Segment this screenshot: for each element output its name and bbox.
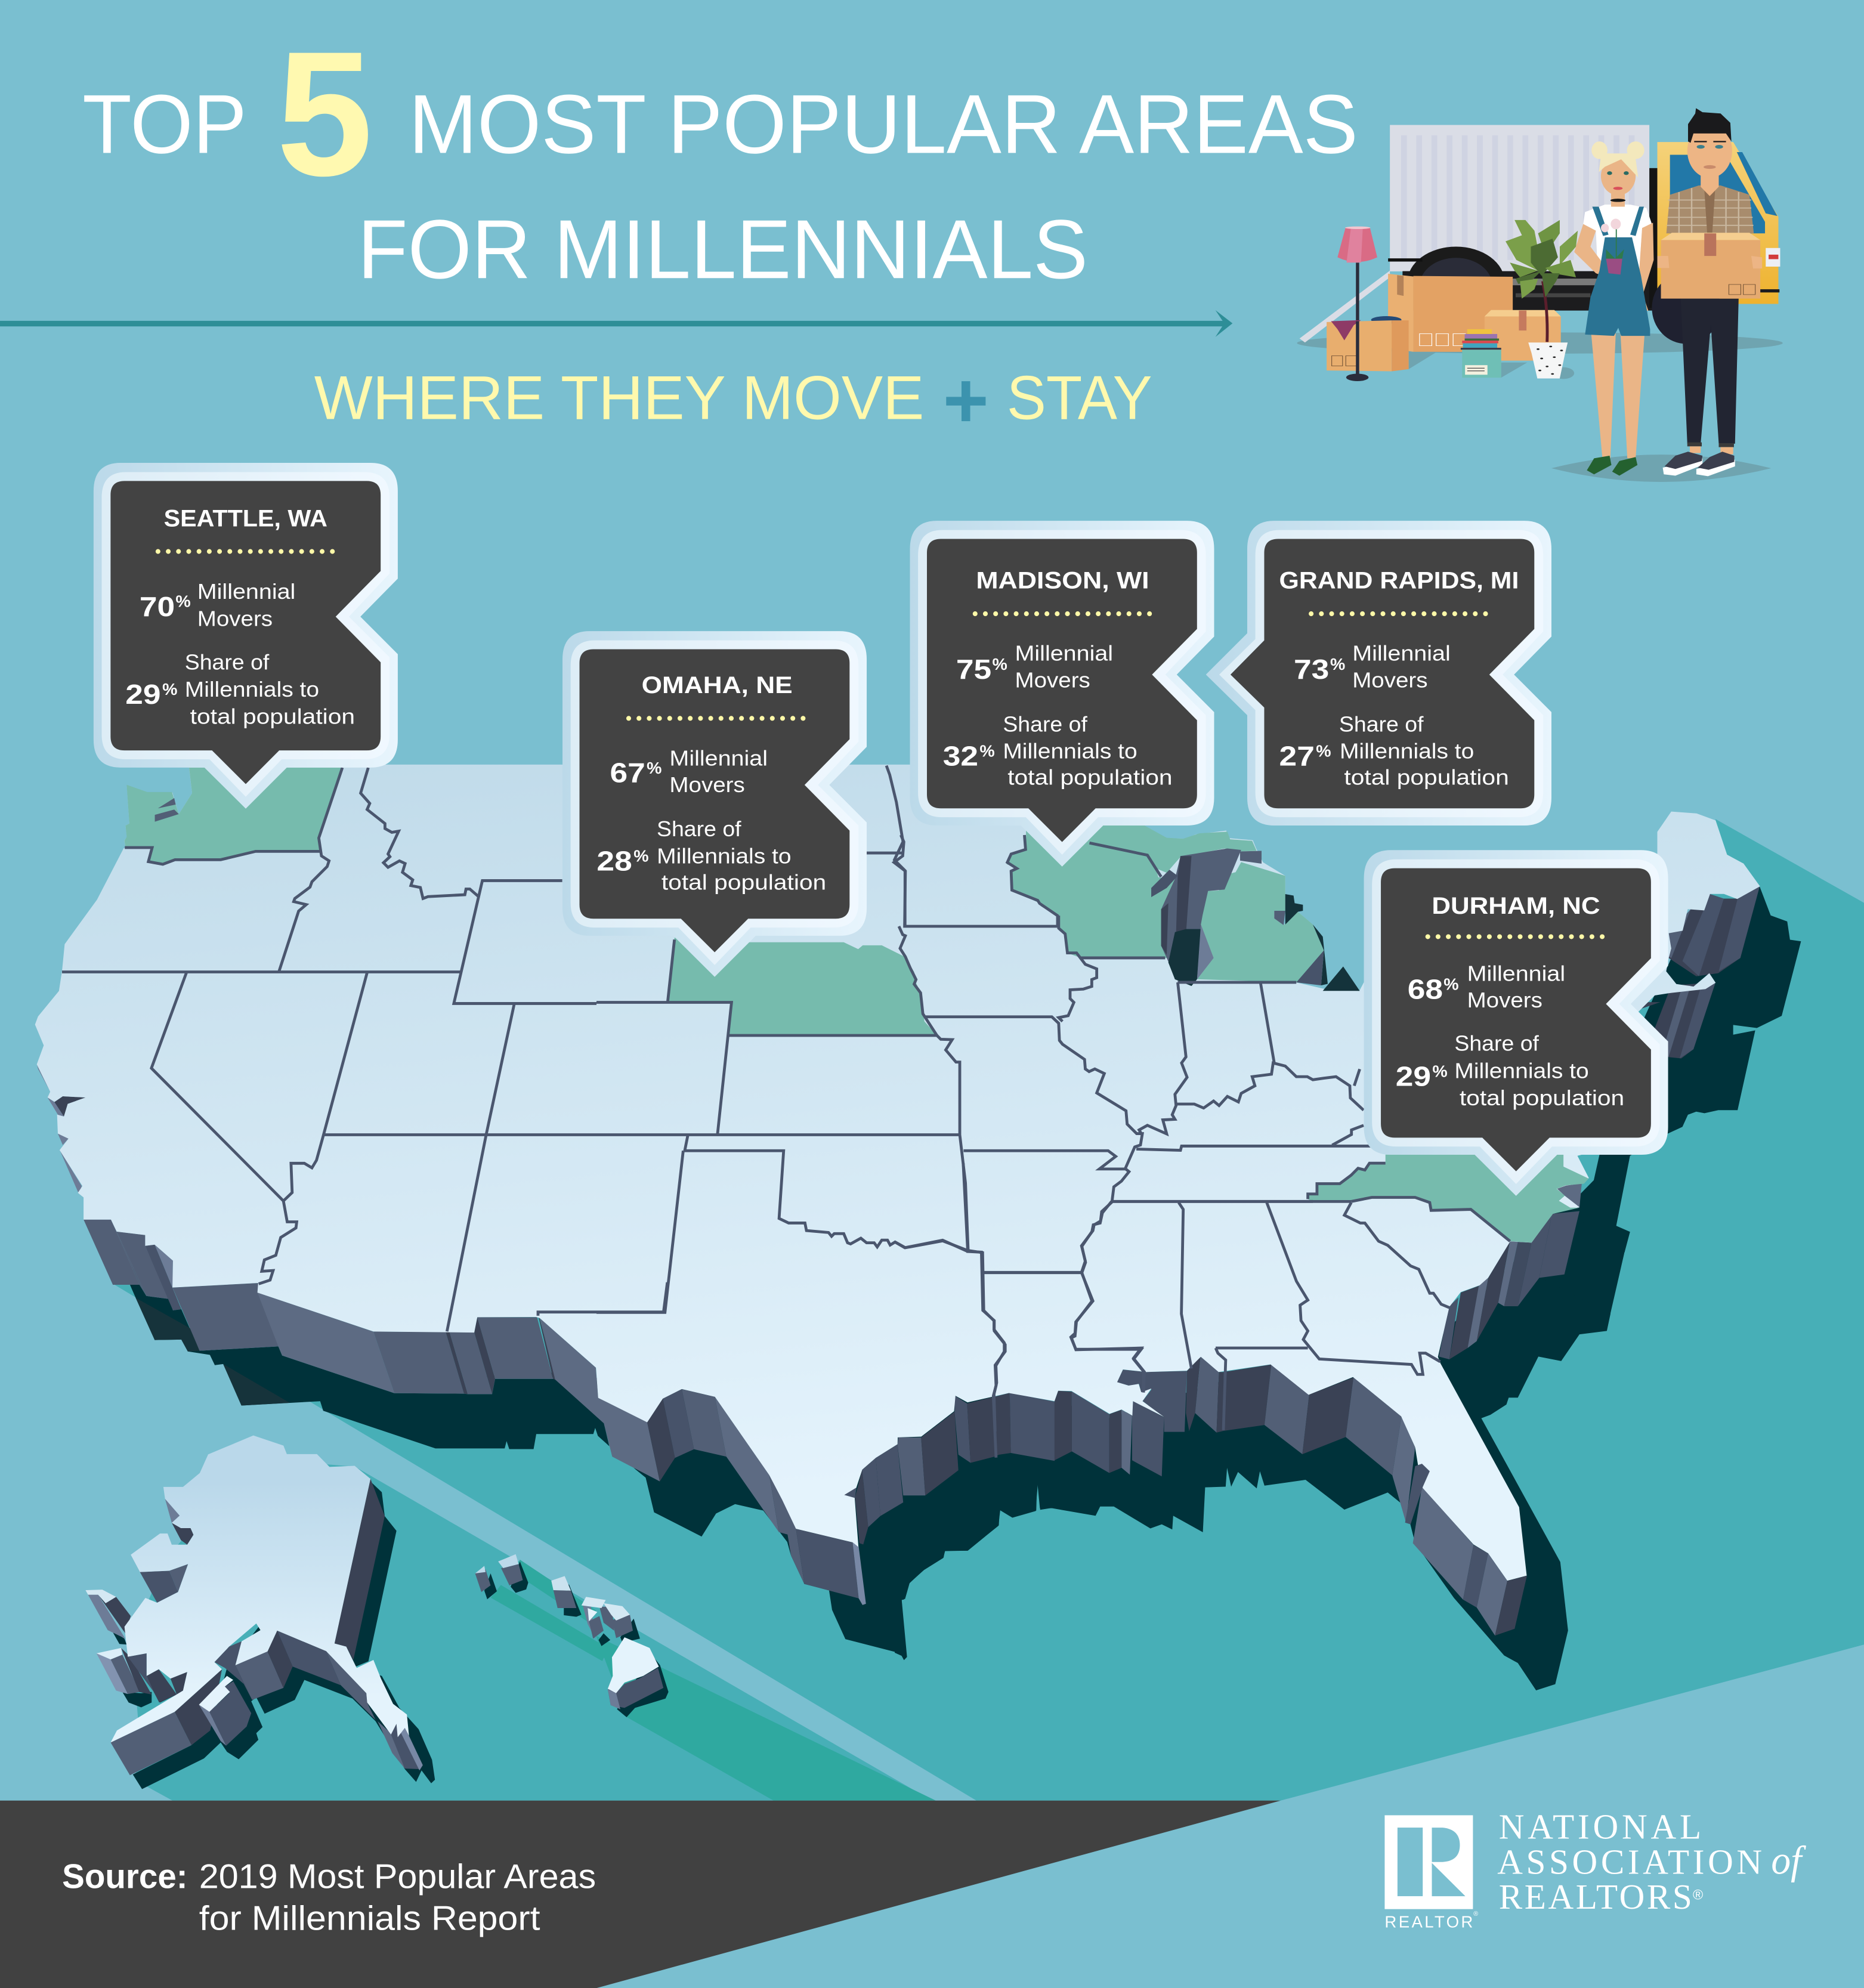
callout: Durham, NC: Millennials to	[1454, 1059, 1589, 1083]
callout: Madison, WI: Millennial	[1015, 641, 1113, 666]
subtitle: WHERE THEY MOVE	[314, 364, 924, 433]
map: extruded coast walls	[37, 840, 1760, 1635]
callout: Madison, WI: total population	[1007, 765, 1173, 789]
callout: Madison, WI: MADISON, WI	[976, 567, 1149, 593]
callout: Durham, NC	[1364, 850, 1668, 1196]
logo: National Association of Realtors text: ®	[1473, 1910, 1478, 1918]
callout: Grand Rapids, MI: 27	[1279, 741, 1315, 772]
title: MOST POPULAR AREAS	[409, 77, 1358, 171]
callout: Omaha, NE: Movers	[669, 772, 745, 797]
callout: Seattle, WA: Share of	[185, 650, 270, 674]
logo: Realtor R block	[1384, 1815, 1473, 1909]
callout: Durham, NC: DURHAM, NC	[1432, 893, 1600, 919]
callout: Grand Rapids, MI: Millennials to	[1340, 738, 1474, 763]
icon: potted plant	[1506, 220, 1578, 379]
icon: large cardboard box	[1388, 274, 1513, 369]
subtitle	[314, 356, 1152, 444]
title: FOR MILLENNIALS	[357, 202, 1088, 296]
callout: Omaha, NE	[562, 631, 867, 977]
callout: Omaha, NE: 67	[610, 758, 645, 789]
icon: stack of books on teal box	[1461, 329, 1501, 378]
callout: Seattle, WA: 29	[125, 679, 161, 710]
callout: Madison, WI: %	[979, 742, 995, 760]
source note: for Millennials Report	[199, 1900, 540, 1938]
callout: Madison, WI: 75	[956, 654, 991, 685]
callout: Grand Rapids, MI	[1206, 521, 1551, 826]
wall details over land: Tampa Bay and Texas-Louisiana inlet	[844, 1464, 1430, 1525]
Hawaii	[475, 1554, 669, 1717]
icon: moving truck	[1300, 125, 1780, 344]
logo: National Association of Realtors text	[1384, 1807, 1806, 1931]
callout: Durham, NC: %	[1432, 1062, 1448, 1080]
callout: Durham, NC: Share of	[1454, 1031, 1540, 1056]
title: 5	[276, 15, 373, 213]
callout: Grand Rapids, MI: Movers	[1352, 667, 1427, 692]
icon: feet shadow	[1551, 455, 1771, 482]
callout: Seattle, WA: SEATTLE, WA	[164, 506, 327, 532]
subtitle: STAY	[1007, 364, 1152, 433]
callout: Grand Rapids, MI: Share of	[1339, 712, 1424, 737]
green shadow strips of Hawaii	[491, 1560, 936, 1801]
callout: Durham, NC: 68	[1408, 974, 1443, 1005]
callout: Seattle, WA: 70	[140, 591, 175, 622]
callout: Omaha, NE: %	[633, 847, 649, 865]
callout: Grand Rapids, MI: %	[1330, 655, 1345, 673]
logo: National Association of Realtors text: REALTOR	[1384, 1912, 1473, 1931]
callout: Durham, NC: %	[1443, 975, 1459, 994]
map: contiguous United States land surface	[35, 765, 1760, 1581]
callout: Seattle, WA: %	[175, 592, 191, 611]
logo: National Association of Realtors text: NATIONAL	[1499, 1807, 1701, 1847]
logo: National Association of Realtors text: of	[1771, 1838, 1806, 1883]
footer bar	[0, 1801, 1281, 1988]
icon: ground shadow	[1297, 332, 1783, 354]
title	[82, 15, 1358, 296]
icon: woman in overalls holding orchid	[1574, 141, 1653, 475]
callout: Grand Rapids, MI: %	[1316, 742, 1331, 760]
callout: Durham, NC: Millennial	[1467, 961, 1565, 985]
callout: Omaha, NE: total population	[661, 870, 826, 895]
callout: Madison, WI: 32	[943, 741, 978, 772]
icon: floor lamp	[1337, 227, 1377, 381]
callout: Seattle, WA: Millennials to	[185, 677, 319, 701]
map: state boundary lines	[62, 766, 1510, 1458]
callout: Durham, NC: 29	[1396, 1061, 1431, 1092]
highlighted state: Nebraska	[669, 938, 937, 1035]
callout: Durham, NC: Movers	[1467, 988, 1542, 1012]
callout: Madison, WI: Millennials to	[1003, 738, 1137, 763]
icon: open box with clothes	[1327, 316, 1409, 375]
logo: National Association of Realtors text: ®	[1693, 1887, 1703, 1903]
subtitle: +	[943, 356, 989, 444]
callout: Omaha, NE: %	[647, 759, 661, 777]
callout: Madison, WI	[910, 521, 1214, 867]
callout: Seattle, WA: total population	[190, 704, 355, 728]
arrow divider	[0, 310, 1232, 337]
highlighted state: Washington	[125, 768, 342, 864]
logo: National Association of Realtors text: REALTORS	[1499, 1877, 1692, 1916]
callout: Grand Rapids, MI: total population	[1344, 765, 1509, 789]
callout: Seattle, WA: Movers	[197, 606, 273, 630]
callout: Madison, WI: Movers	[1015, 667, 1090, 692]
callout: Madison, WI: Share of	[1003, 712, 1088, 737]
callout: Omaha, NE: OMAHA, NE	[642, 672, 793, 698]
icon: small box	[1485, 310, 1561, 378]
callout: Omaha, NE: Millennials to	[657, 844, 792, 868]
Alaska	[85, 1436, 435, 1789]
callout: Omaha, NE: 28	[596, 846, 632, 877]
callout: Omaha, NE: Share of	[657, 817, 742, 841]
icon: man carrying a box	[1657, 108, 1762, 476]
callout: Grand Rapids, MI: 73	[1294, 654, 1329, 685]
callout: Seattle, WA	[94, 463, 398, 809]
highlighted state: North Carolina	[1308, 1155, 1588, 1242]
illustration: couple moving with truck and boxes	[1297, 108, 1783, 482]
logo: National Association of Realtors text: ASSOCIATION	[1497, 1842, 1762, 1882]
map: dark cast shadow of mainland	[130, 886, 1801, 1690]
long teal shadow of the mainland	[114, 819, 1864, 1801]
callout: Durham, NC: total population	[1460, 1086, 1624, 1110]
long teal shadow of Alaska and Hawaii	[133, 1458, 932, 1801]
source note	[62, 1857, 596, 1938]
callout: Grand Rapids, MI: GRAND RAPIDS, MI	[1279, 567, 1519, 593]
source note: Source:	[62, 1857, 188, 1896]
callout: Seattle, WA: %	[162, 680, 177, 698]
callout: Grand Rapids, MI: Millennial	[1352, 641, 1451, 666]
highlighted states: Wisconsin and Michigan	[1007, 821, 1324, 982]
callout: Omaha, NE: Millennial	[669, 746, 768, 771]
Great Lakes: Lake Michigan walls and shadows	[1151, 848, 1360, 991]
title: TOP	[82, 77, 247, 171]
callout: Seattle, WA: Millennial	[197, 579, 295, 604]
callout: Madison, WI: %	[992, 655, 1007, 673]
source note: 2019 Most Popular Areas	[199, 1857, 596, 1896]
